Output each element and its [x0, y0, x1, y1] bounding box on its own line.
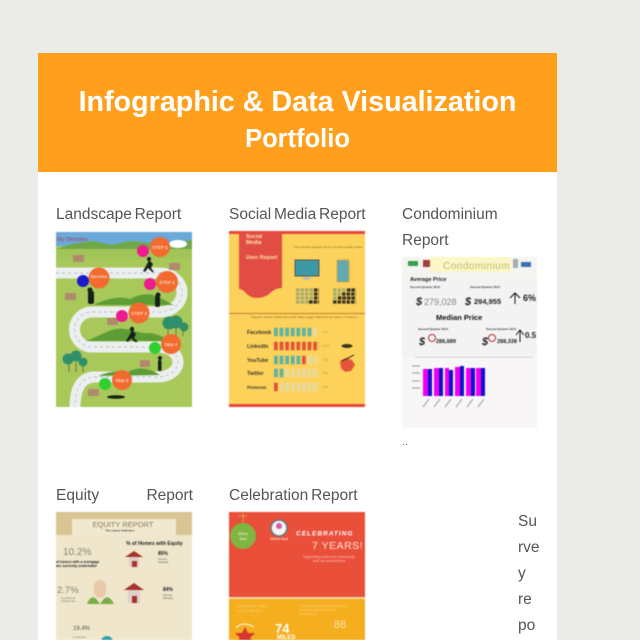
image: social media report infographic: The devices people use to connect social media	[294, 245, 362, 249]
narrow column text: survey report: re	[518, 591, 532, 608]
heading: equity report: Equity Report	[56, 487, 193, 504]
image: condominium report infographic: $	[464, 296, 472, 308]
image: landscape report infographic: Step 4	[164, 342, 178, 347]
narrow column text: survey report: rve	[518, 539, 540, 556]
image: landscape report infographic	[55, 231, 193, 408]
image: social media report infographic: 15%	[322, 385, 328, 389]
image: condominium report infographic: Condominium	[443, 261, 510, 272]
dot grids	[296, 290, 356, 302]
image: condominium report infographic: 0.5	[525, 331, 537, 340]
figures	[88, 257, 162, 399]
heading: condominium report: Condominium	[402, 206, 498, 223]
house icons	[125, 551, 143, 557]
image: landscape report infographic: STEP 3	[131, 311, 147, 316]
narrow column text: survey report	[518, 513, 540, 634]
image: celebration report infographic: of fair trade food	[237, 609, 263, 613]
image: celebration report infographic	[228, 511, 366, 640]
image: social media report infographic: Social	[246, 234, 263, 240]
image: social media report infographic: 100%	[322, 344, 330, 348]
image: equity report infographic: EQUITY REPORT	[92, 520, 154, 529]
ribbon	[239, 233, 282, 298]
image: equity report infographic: are currently underwater	[56, 564, 98, 568]
platform labels: Pinterest	[247, 385, 267, 390]
hills	[95, 294, 174, 305]
road	[56, 273, 182, 407]
image: equity report infographic: of homes	[73, 635, 86, 639]
person icon	[94, 580, 106, 598]
image: celebration report infographic: 7 YEARS!	[312, 540, 363, 552]
arrow	[510, 293, 520, 304]
image: celebration report infographic: 88	[334, 619, 346, 631]
image: condominium report infographic: 294,955	[474, 297, 501, 306]
heading: condominium report: Report	[402, 232, 449, 248]
star icon	[235, 627, 255, 640]
markers	[137, 245, 149, 257]
platform labels	[247, 330, 271, 390]
image: condominium report infographic: Second Quarter 2012	[410, 285, 440, 289]
image: condominium report infographic: $	[415, 296, 423, 308]
image: equity report infographic: w/equity	[158, 560, 169, 564]
bar chart	[412, 366, 485, 407]
image: equity report infographic: 85%	[158, 551, 169, 557]
image: celebration report infographic: serving organic for food	[299, 608, 336, 612]
platform labels: Twitter	[247, 371, 264, 377]
image: equity report infographic: 10.2%	[63, 547, 91, 558]
image: social media report infographic: Media	[246, 240, 263, 246]
title: Infographic & Data Visualization	[79, 86, 516, 118]
image: celebration report infographic: 74	[275, 621, 290, 636]
image: celebration report infographic: and our environment	[313, 559, 345, 563]
image: social media report infographic: 71%	[322, 330, 328, 334]
image: celebration report infographic: Supporting local food, community	[303, 555, 355, 559]
narrow column text: survey report: y	[518, 565, 526, 582]
image: condominium report infographic: 288,338	[497, 339, 517, 345]
image: condominium report infographic: Second Quarter 2012	[418, 327, 448, 331]
heading: celebration report: Celebration Report	[229, 487, 358, 504]
image: social media report infographic: Popular social media sites with data usage statistics by share of visitors	[251, 315, 358, 319]
image: equity report infographic: The Latest Statistics	[105, 528, 135, 532]
heading: landscape report: Landscape Report	[56, 206, 181, 223]
narrow column text: survey report: po	[518, 617, 535, 634]
image: celebration report infographic: Ethnic	[238, 532, 248, 536]
image: social media report infographic	[228, 230, 366, 408]
image: landscape report infographic: Step 5	[115, 378, 129, 383]
image: condominium report infographic: 6%	[523, 293, 536, 303]
image: social media report infographic: 73%	[322, 358, 328, 362]
image: condominium report infographic	[402, 256, 537, 428]
image: celebration report infographic: Soul	[239, 537, 247, 541]
image: social media report infographic: User Report	[246, 255, 278, 261]
image: condominium report infographic: Average Price	[410, 277, 446, 283]
image: celebration report infographic: Celebrating 7 years	[237, 604, 268, 608]
narrow column text: survey report: Su	[518, 513, 537, 530]
image: equity report infographic: of homes with a mortgage	[56, 560, 99, 564]
platform labels: Facebook	[247, 330, 271, 336]
image: landscape report infographic: STEP 2	[159, 280, 175, 285]
image: condominium report infographic: Median Price	[436, 313, 482, 322]
panel: white card	[38, 53, 557, 640]
image: condominium report infographic: 279,028	[424, 297, 457, 307]
devices	[295, 260, 319, 276]
signposts	[65, 255, 180, 396]
image: landscape report infographic: My Direction	[57, 237, 88, 243]
image: celebration report infographic: CELEBRATING	[296, 530, 353, 538]
image: equity report infographic	[55, 511, 193, 640]
image: equity report infographic: Homes	[163, 593, 172, 597]
platform labels: LinkedIn	[247, 344, 268, 350]
image: condominium report infographic: 286,689	[436, 339, 456, 345]
heading: condominium report	[402, 206, 498, 248]
image: celebration report infographic: Ethnic Soul	[270, 537, 288, 541]
image: landscape report infographic: STEP 5	[152, 245, 168, 250]
image: equity report infographic: % of Homes with Equity	[126, 541, 183, 547]
platform labels: YouTube	[247, 358, 269, 364]
image: condominium report infographic: Second Quarter 2013	[486, 327, 516, 331]
image: condominium report infographic: Second Quarter 2013	[470, 285, 500, 289]
ellipsis note: ..	[402, 436, 408, 448]
subtitle: Portfolio	[245, 125, 350, 153]
image: equity report infographic: 84%	[163, 587, 174, 593]
image: equity report infographic: 19.4%	[73, 626, 91, 632]
image: celebration report infographic: businesses	[299, 612, 317, 616]
image: equity report infographic: Homes	[158, 557, 167, 561]
header banner	[38, 53, 557, 172]
pictogram rows	[274, 332, 319, 387]
arrow	[516, 330, 524, 342]
image: equity report infographic: Conditional	[61, 596, 75, 600]
image: celebration report infographic: Congratulations Ethnic Soul on	[299, 604, 347, 608]
image: social media report infographic: 18%	[322, 371, 328, 375]
image: condominium report infographic: $	[481, 336, 489, 348]
image: equity report infographic: Default rate	[61, 599, 76, 603]
heading: social media report: Social Media Report	[229, 206, 366, 223]
image: condominium report infographic: $	[418, 336, 426, 348]
image: landscape report infographic: Become	[91, 274, 108, 279]
image: equity report infographic: 2.7%	[57, 585, 79, 596]
image: equity report infographic: w/equity	[163, 596, 174, 600]
trees	[62, 316, 188, 366]
